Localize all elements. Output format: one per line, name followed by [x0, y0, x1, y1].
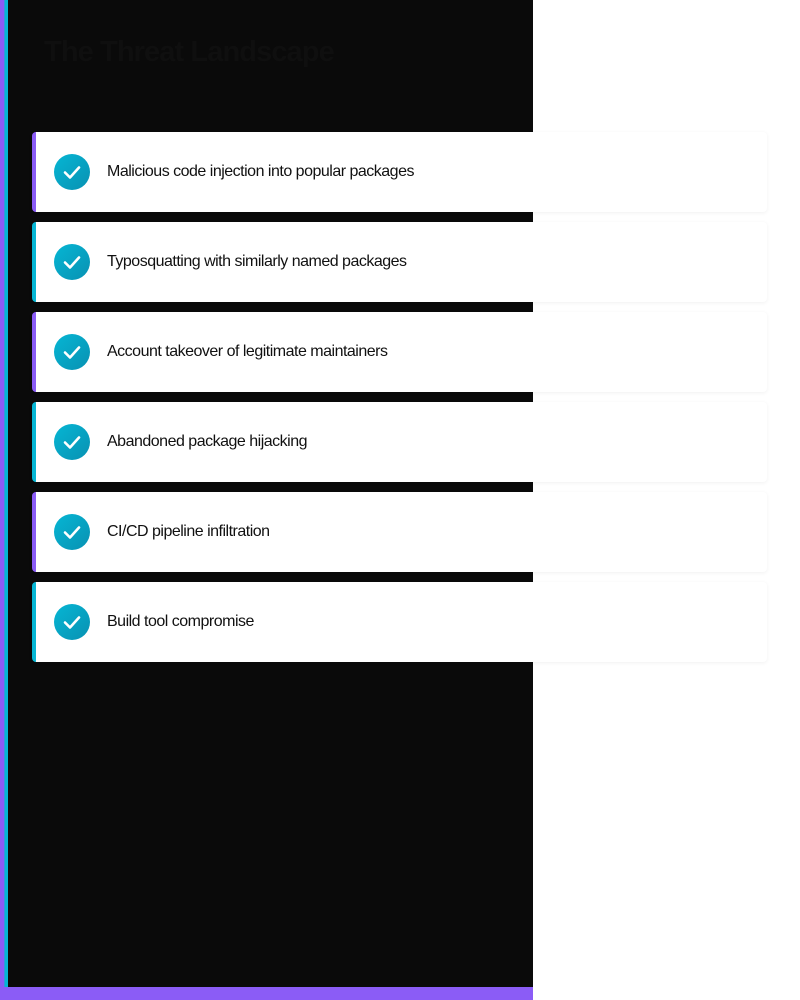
card: typosquatting: Typosquatting with similarly named packages [107, 253, 407, 270]
card: build tool: Build tool compromise [107, 613, 254, 630]
card: abandoned package [32, 402, 767, 482]
card: build tool [32, 582, 767, 662]
card: typosquatting [32, 222, 767, 302]
card: CI/CD: CI/CD pipeline infiltration [107, 523, 270, 540]
card: account takeover: Account takeover of legitimate maintainers [107, 343, 387, 360]
bottom accent bar [0, 987, 533, 1000]
card: account takeover [32, 312, 767, 392]
card: CI/CD [32, 492, 767, 572]
card: abandoned package: Abandoned package hijacking [107, 433, 307, 450]
left accent bar [0, 0, 8, 988]
title: The Threat Landscape [44, 36, 334, 68]
card: malicious code injection: Malicious code injection into popular packages [107, 163, 414, 180]
card: malicious code injection [32, 132, 767, 212]
dark panel [0, 0, 533, 988]
